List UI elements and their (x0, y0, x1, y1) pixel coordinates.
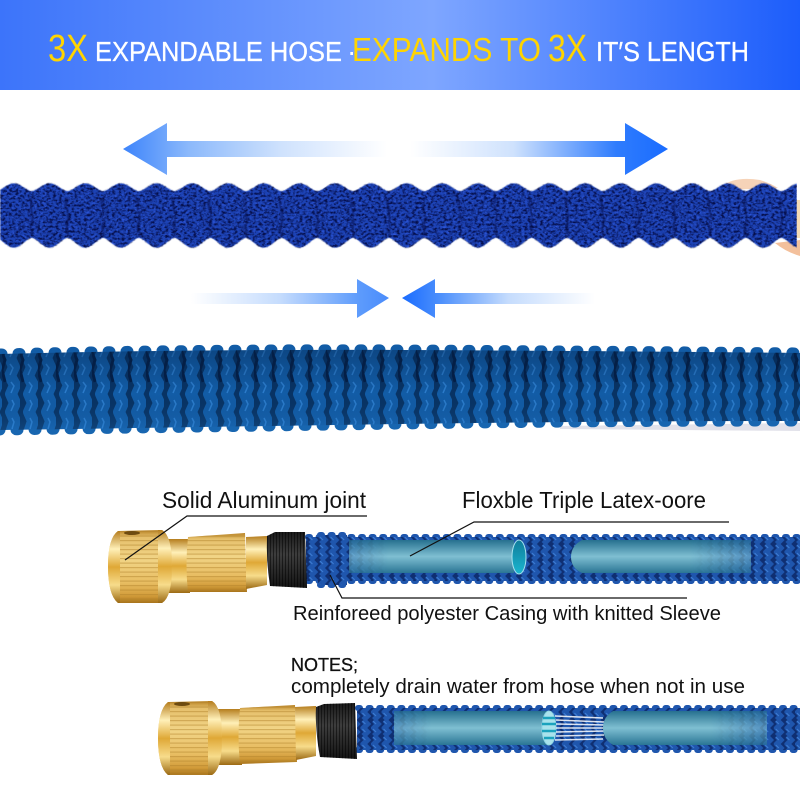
title (48, 28, 749, 70)
braided casing (357, 708, 800, 750)
braided casing (306, 535, 800, 585)
title: 3X (548, 28, 587, 70)
label: solid aluminum joint: Solid Aluminum joint (162, 487, 367, 513)
title: 3X (48, 28, 88, 70)
hand holding hose (722, 179, 800, 256)
compressed hose (0, 350, 800, 431)
arrow: compress left (402, 279, 595, 318)
notes: completely drain water from hose when not in use (291, 676, 745, 698)
title: EXPANDABLE HOSE (95, 36, 342, 67)
notes: NOTES; (291, 655, 358, 675)
hose diagram 1 (108, 516, 800, 603)
arrow: expand right (410, 123, 668, 175)
notes (291, 655, 745, 698)
rubber collar (316, 703, 357, 759)
stretched hose (0, 182, 797, 250)
brass connector (108, 530, 267, 603)
header banner (0, 0, 800, 90)
title: EXPANDS TO (352, 31, 541, 68)
arrow: compress right (191, 279, 389, 318)
latex core left section (349, 540, 526, 574)
leader lines (125, 516, 729, 598)
latex core right section (603, 711, 767, 745)
latex core right section (571, 540, 751, 573)
arrow: expand left (123, 123, 387, 175)
title: · (347, 36, 356, 67)
title: IT′S LENGTH (596, 36, 749, 67)
water streaks (555, 716, 606, 740)
label: reinforced polyester casing: Reinforeed polyester Casing with knitted Sleeve (293, 603, 721, 625)
rubber collar (267, 532, 307, 588)
label: flexible latex core: Floxble Triple Latex-oore (462, 487, 706, 513)
hose diagram 2 (158, 701, 800, 775)
brass connector (158, 701, 316, 775)
latex core left section (394, 711, 556, 745)
